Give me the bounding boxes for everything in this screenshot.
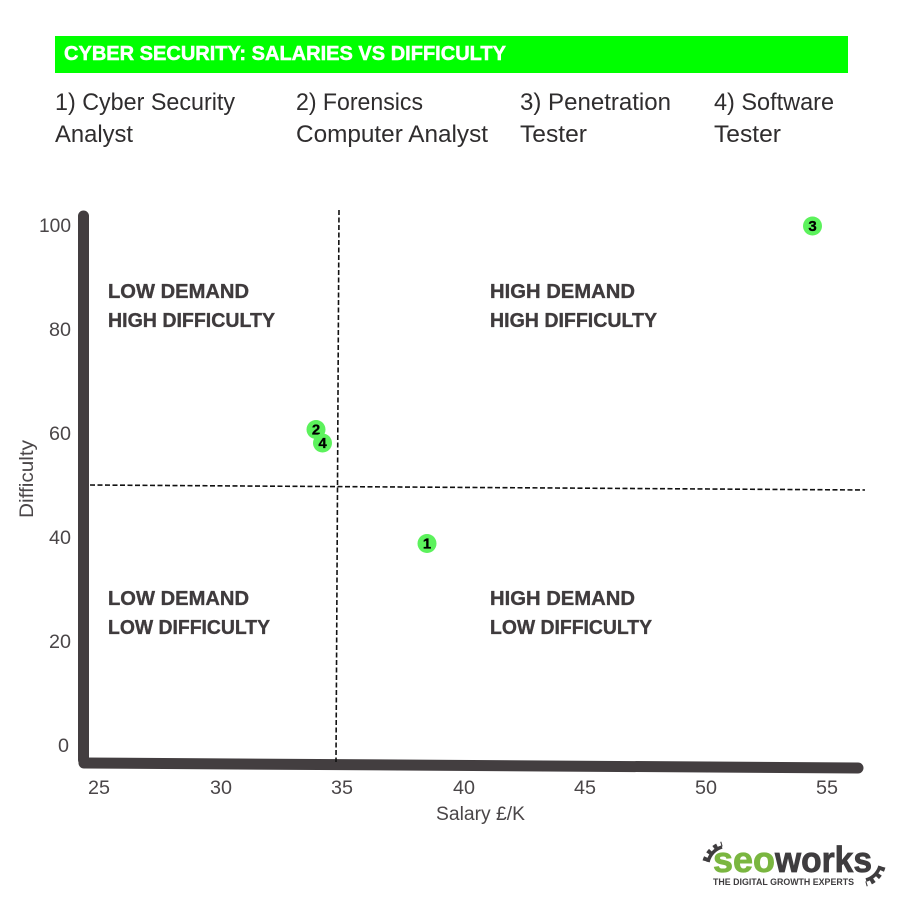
quadrant label: low demand high difficulty: [108, 281, 276, 332]
title banner: CYBER SECURITY: SALARIES VS DIFFICULTY: [64, 43, 507, 65]
quadrant label: low demand low difficulty: LOW DEMAND: [108, 588, 249, 610]
y axis tick labels: 40: [49, 528, 71, 549]
legend item 1: [55, 89, 235, 148]
y axis tick labels: 100: [39, 216, 71, 237]
data point 1: 1: [423, 536, 431, 552]
x axis tick labels: 35: [331, 778, 353, 799]
quadrant label: low demand high difficulty: HIGH DIFFICULTY: [108, 310, 276, 332]
y axis title: Difficulty: [17, 439, 38, 518]
quadrant label: high demand low difficulty: [490, 588, 653, 639]
legend: job roles: [55, 89, 834, 148]
title banner: [55, 36, 848, 73]
quadrant label: high demand high difficulty: HIGH DIFFICULTY: [490, 310, 658, 332]
data point 4: 4: [318, 435, 327, 452]
x axis tick labels: 45: [574, 778, 596, 799]
x axis tick labels: 30: [210, 778, 232, 799]
quadrant label: high demand low difficulty: LOW DIFFICULTY: [490, 617, 653, 639]
x axis tick labels: [88, 778, 838, 799]
legend item 3: 3) Penetration: [520, 89, 671, 116]
logo: seoworks: works: [774, 839, 872, 880]
legend item 4: Tester: [714, 121, 781, 148]
x axis tick labels: 50: [695, 778, 717, 799]
data point 2: [306, 420, 326, 439]
y axis tick labels: 80: [49, 320, 71, 341]
logo gear arcs: [705, 844, 883, 884]
legend item 4: 4) Software: [714, 89, 834, 116]
legend item 2: Computer Analyst: [296, 121, 488, 148]
x axis title: Salary £/K: [436, 804, 525, 825]
data point 3: 3: [808, 218, 817, 235]
legend item 4: [714, 89, 834, 148]
quadrant dividers: [90, 210, 865, 762]
x axis tick labels: 55: [816, 778, 838, 799]
legend item 3: [520, 89, 671, 148]
quadrant label: high demand low difficulty: HIGH DEMAND: [490, 588, 635, 610]
y axis tick labels: 0: [58, 736, 69, 757]
quadrant label: low demand low difficulty: [108, 588, 271, 639]
logo wordmark: seo: [713, 839, 775, 880]
quadrant label: low demand high difficulty: LOW DEMAND: [108, 281, 249, 303]
y axis tick labels: 60: [49, 424, 71, 445]
data point 3: [803, 216, 822, 236]
legend item 2: 2) Forensics: [296, 89, 423, 116]
legend item 1: Analyst: [55, 121, 133, 148]
legend item 1: 1) Cyber Security: [55, 89, 235, 116]
legend item 3: Tester: [520, 121, 587, 148]
quadrant label: high demand high difficulty: HIGH DEMAND: [490, 281, 635, 303]
data point 1: [418, 534, 436, 553]
axes: [84, 216, 858, 768]
logo: seoworks: [705, 839, 883, 887]
quadrant label: high demand high difficulty: [490, 281, 658, 332]
x axis tick labels: 40: [453, 778, 475, 799]
x axis tick labels: 25: [88, 778, 110, 799]
data point 2: 2: [312, 422, 320, 438]
data point 4: [313, 434, 332, 452]
quadrant label: low demand low difficulty: LOW DIFFICULTY: [108, 617, 271, 639]
logo tagline: THE DIGITAL GROWTH EXPERTS: [713, 877, 854, 887]
scatter chart: [17, 210, 865, 825]
legend item 2: [296, 89, 488, 148]
y axis tick labels: 20: [49, 632, 71, 653]
y axis tick labels: [39, 216, 71, 757]
